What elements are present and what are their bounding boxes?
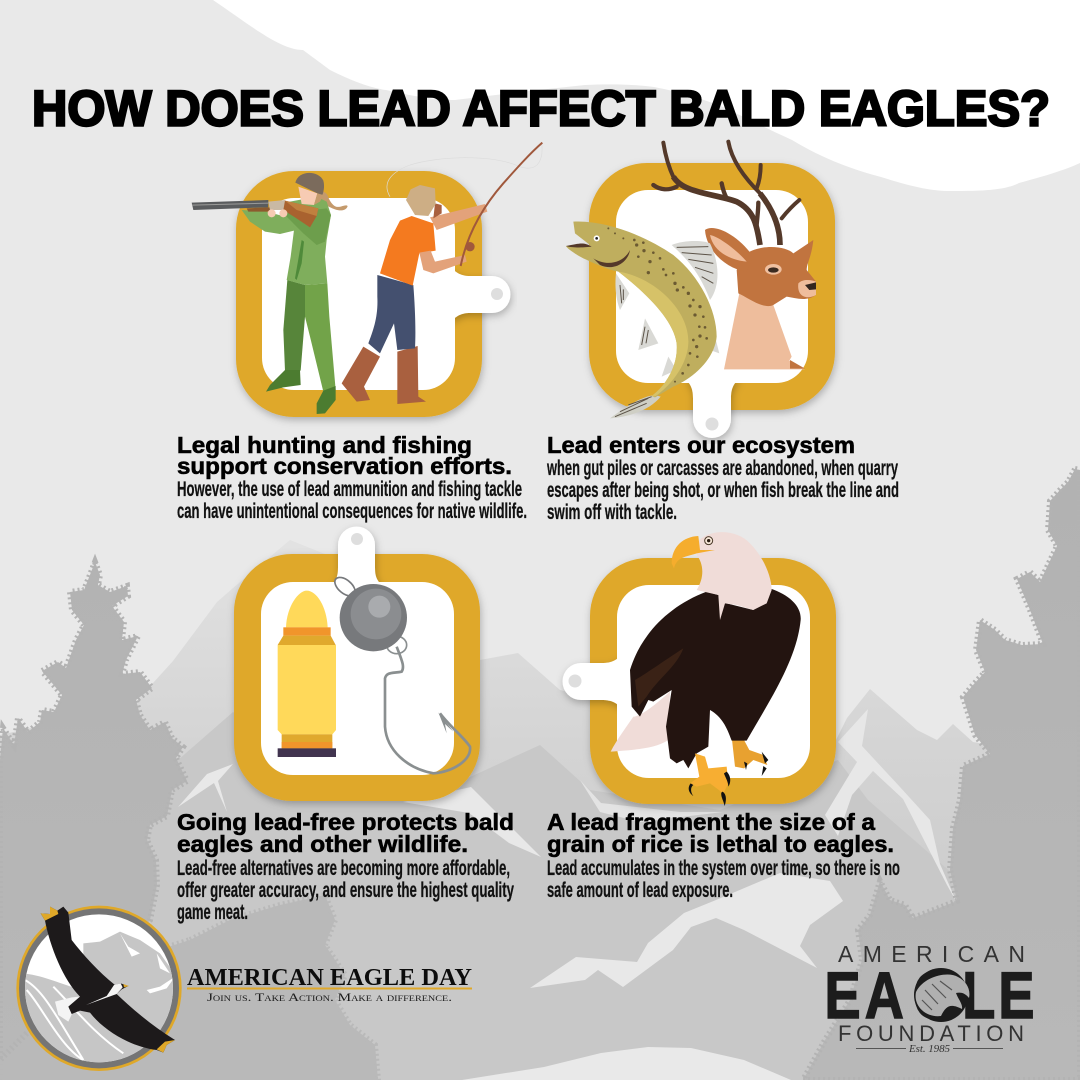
logo: American Eagle Day emblem xyxy=(16,906,182,1071)
logo: American Eagle Foundation: FOUNDATION xyxy=(838,1021,1024,1046)
text: legal hunting and fishing: However, the use of lead ammunition and fishing tackle xyxy=(177,478,522,501)
text: legal hunting and fishing xyxy=(177,432,527,523)
panel: lethal fragment xyxy=(547,532,900,902)
logo: American Eagle Foundation: AMERICAN xyxy=(838,941,1025,967)
text: lead enters our ecosystem: Lead enters our ecosystem xyxy=(547,432,855,458)
panel: hunting and fishing xyxy=(177,143,542,523)
text: going lead-free: eagles and other wildlife. xyxy=(177,831,468,857)
text: legal hunting and fishing: Legal hunting and fishing xyxy=(177,432,472,458)
frame with tag handle xyxy=(589,163,835,438)
text: lead fragment: grain of rice is lethal to eagles. xyxy=(547,831,894,857)
text: legal hunting and fishing: support conservation efforts. xyxy=(177,453,512,479)
text: lead fragment: safe amount of lead exposure. xyxy=(547,879,733,902)
text: going lead-free: Going lead-free protects bald xyxy=(177,809,514,835)
frame with tag handle xyxy=(562,558,836,804)
text: going lead-free: offer greater accuracy, and ensure the highest quality xyxy=(177,879,514,902)
illustration: bullet and sinker with hook xyxy=(278,574,470,773)
text: going lead-free: game meat. xyxy=(177,901,248,924)
logo text: American Eagle Day: AMERICAN EAGLE DAY xyxy=(187,965,472,991)
text: going lead-free xyxy=(177,809,514,924)
text: lead fragment: A lead fragment the size of a xyxy=(547,809,875,835)
panel: going lead-free xyxy=(177,526,514,924)
text: lead enters our ecosystem: swim off with tackle. xyxy=(547,501,677,524)
panel: lead enters ecosystem xyxy=(546,142,899,524)
frame with tag handle xyxy=(236,171,510,417)
title: HOW DOES LEAD AFFECT BALD EAGLES? xyxy=(32,80,1050,136)
logo: American Eagle Foundation xyxy=(825,941,1034,1055)
logo text: American Eagle Day xyxy=(187,965,472,1004)
illustration: trout and deer xyxy=(566,142,816,418)
text: lead enters our ecosystem xyxy=(546,432,899,524)
logo: American Eagle Foundation: EAGLE xyxy=(825,958,1034,1032)
logo text: American Eagle Day: Join us. Take Action. Make a difference. xyxy=(207,990,452,1004)
logo: American Eagle Foundation: Est. 1985 xyxy=(908,1043,950,1055)
text: lead fragment xyxy=(547,809,900,902)
text: going lead-free: Lead-free alternatives are becoming more affordable, xyxy=(177,857,510,880)
illustration: hunter and angler xyxy=(192,143,542,414)
text: legal hunting and fishing: can have unintentional consequences for native wildlife. xyxy=(177,500,527,523)
illustration: bald eagle xyxy=(611,532,801,806)
frame with tag handle xyxy=(234,526,480,801)
